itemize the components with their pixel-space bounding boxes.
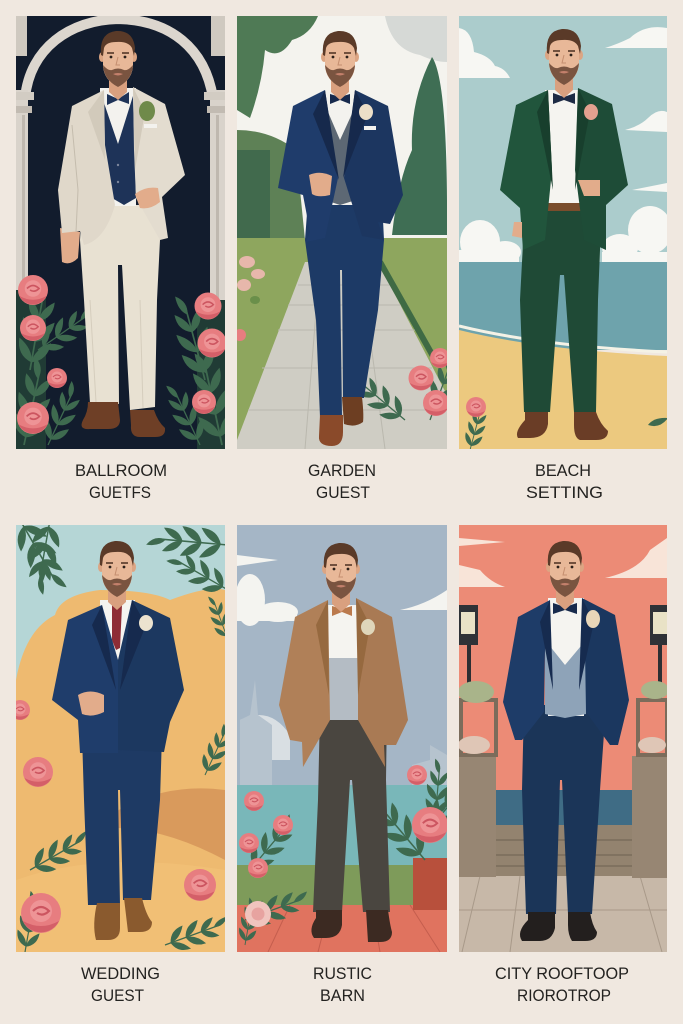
top leaves bbox=[18, 525, 225, 636]
left planter and lamp bbox=[458, 605, 496, 877]
caption: beach setting: SETTING bbox=[526, 483, 603, 502]
darker dune bbox=[118, 788, 225, 860]
clouds bbox=[459, 27, 672, 264]
floor lines bbox=[459, 876, 667, 952]
caption: ballroom guests: BALLROOM bbox=[75, 461, 167, 480]
grey cloud bbox=[385, 16, 447, 62]
beach foliage bbox=[465, 397, 667, 449]
roses and foliage left bbox=[16, 275, 86, 449]
panel: city rooftop bbox=[458, 525, 669, 952]
clouds bbox=[459, 538, 667, 587]
caption: wedding guest: GUEST bbox=[91, 986, 144, 1005]
trees bbox=[237, 16, 447, 240]
man in green suit bbox=[500, 29, 628, 440]
barn sky bbox=[237, 525, 447, 795]
stone arch and columns bbox=[16, 16, 225, 300]
lawn bbox=[237, 238, 447, 448]
man in tan jacket and charcoal trousers bbox=[279, 543, 408, 942]
panel: wedding guest bbox=[16, 525, 225, 952]
stone floor bbox=[459, 876, 667, 952]
caption: rustic barn bbox=[313, 964, 372, 1005]
caption: wedding guest bbox=[81, 964, 160, 1005]
roses right bbox=[364, 348, 447, 420]
man in cream suit with navy vest bbox=[58, 31, 185, 437]
caption: rustic barn: BARN bbox=[320, 986, 365, 1005]
steps bbox=[462, 840, 667, 866]
wedding sky bbox=[16, 525, 225, 680]
right planter and lamp bbox=[632, 605, 669, 878]
caption: garden guest: GUEST bbox=[316, 483, 370, 502]
paved path bbox=[237, 262, 447, 449]
panel: rustic barn bbox=[237, 525, 447, 952]
path paving lines bbox=[248, 284, 447, 449]
man in navy suit with light blue vest bbox=[503, 541, 629, 941]
sand hill bbox=[16, 589, 225, 880]
sea band bbox=[459, 790, 667, 825]
panel: garden guest bbox=[237, 16, 447, 449]
foam bbox=[459, 326, 667, 352]
sand bbox=[459, 330, 667, 449]
water bbox=[237, 785, 447, 867]
caption: wedding guest: WEDDING bbox=[81, 964, 160, 983]
caption: city rooftop: CITY ROOFTOOP bbox=[495, 964, 629, 983]
coral sky bbox=[459, 525, 667, 795]
man in navy suit with grey vest bbox=[278, 31, 403, 446]
pink flowers left bbox=[234, 256, 265, 341]
sea bbox=[459, 262, 667, 350]
grass bbox=[237, 865, 413, 905]
caption: garden guest bbox=[308, 461, 376, 502]
side foliage and roses bbox=[16, 700, 225, 952]
lighter sand ground bbox=[16, 862, 225, 952]
panel: beach setting bbox=[459, 16, 672, 453]
clouds bbox=[235, 555, 447, 760]
red floor bbox=[237, 905, 447, 952]
caption: ballroom guests: GUETFS bbox=[89, 483, 151, 502]
floor lines bbox=[268, 905, 440, 952]
ballroom background bbox=[16, 16, 225, 449]
caption: beach setting: BEACH bbox=[535, 461, 591, 480]
deck bbox=[459, 825, 667, 878]
roses and foliage right bbox=[166, 292, 225, 449]
caption: beach setting bbox=[526, 461, 603, 502]
caption: city rooftop bbox=[495, 964, 629, 1005]
city buildings bbox=[240, 680, 447, 790]
man in navy suit with red tie bbox=[52, 541, 184, 940]
caption: garden guest: GARDEN bbox=[308, 461, 376, 480]
pink roses left bbox=[233, 791, 315, 947]
panel: ballroom guest bbox=[16, 16, 225, 449]
beach sky bbox=[459, 16, 667, 262]
hedge edge bbox=[381, 260, 434, 357]
caption: rustic barn: RUSTIC bbox=[313, 964, 372, 983]
caption: ballroom guests bbox=[75, 461, 167, 502]
caption: city rooftop: RIOROTROP bbox=[517, 986, 611, 1005]
garden sky bbox=[237, 16, 447, 241]
rose bush with terracotta pot bbox=[357, 758, 482, 910]
